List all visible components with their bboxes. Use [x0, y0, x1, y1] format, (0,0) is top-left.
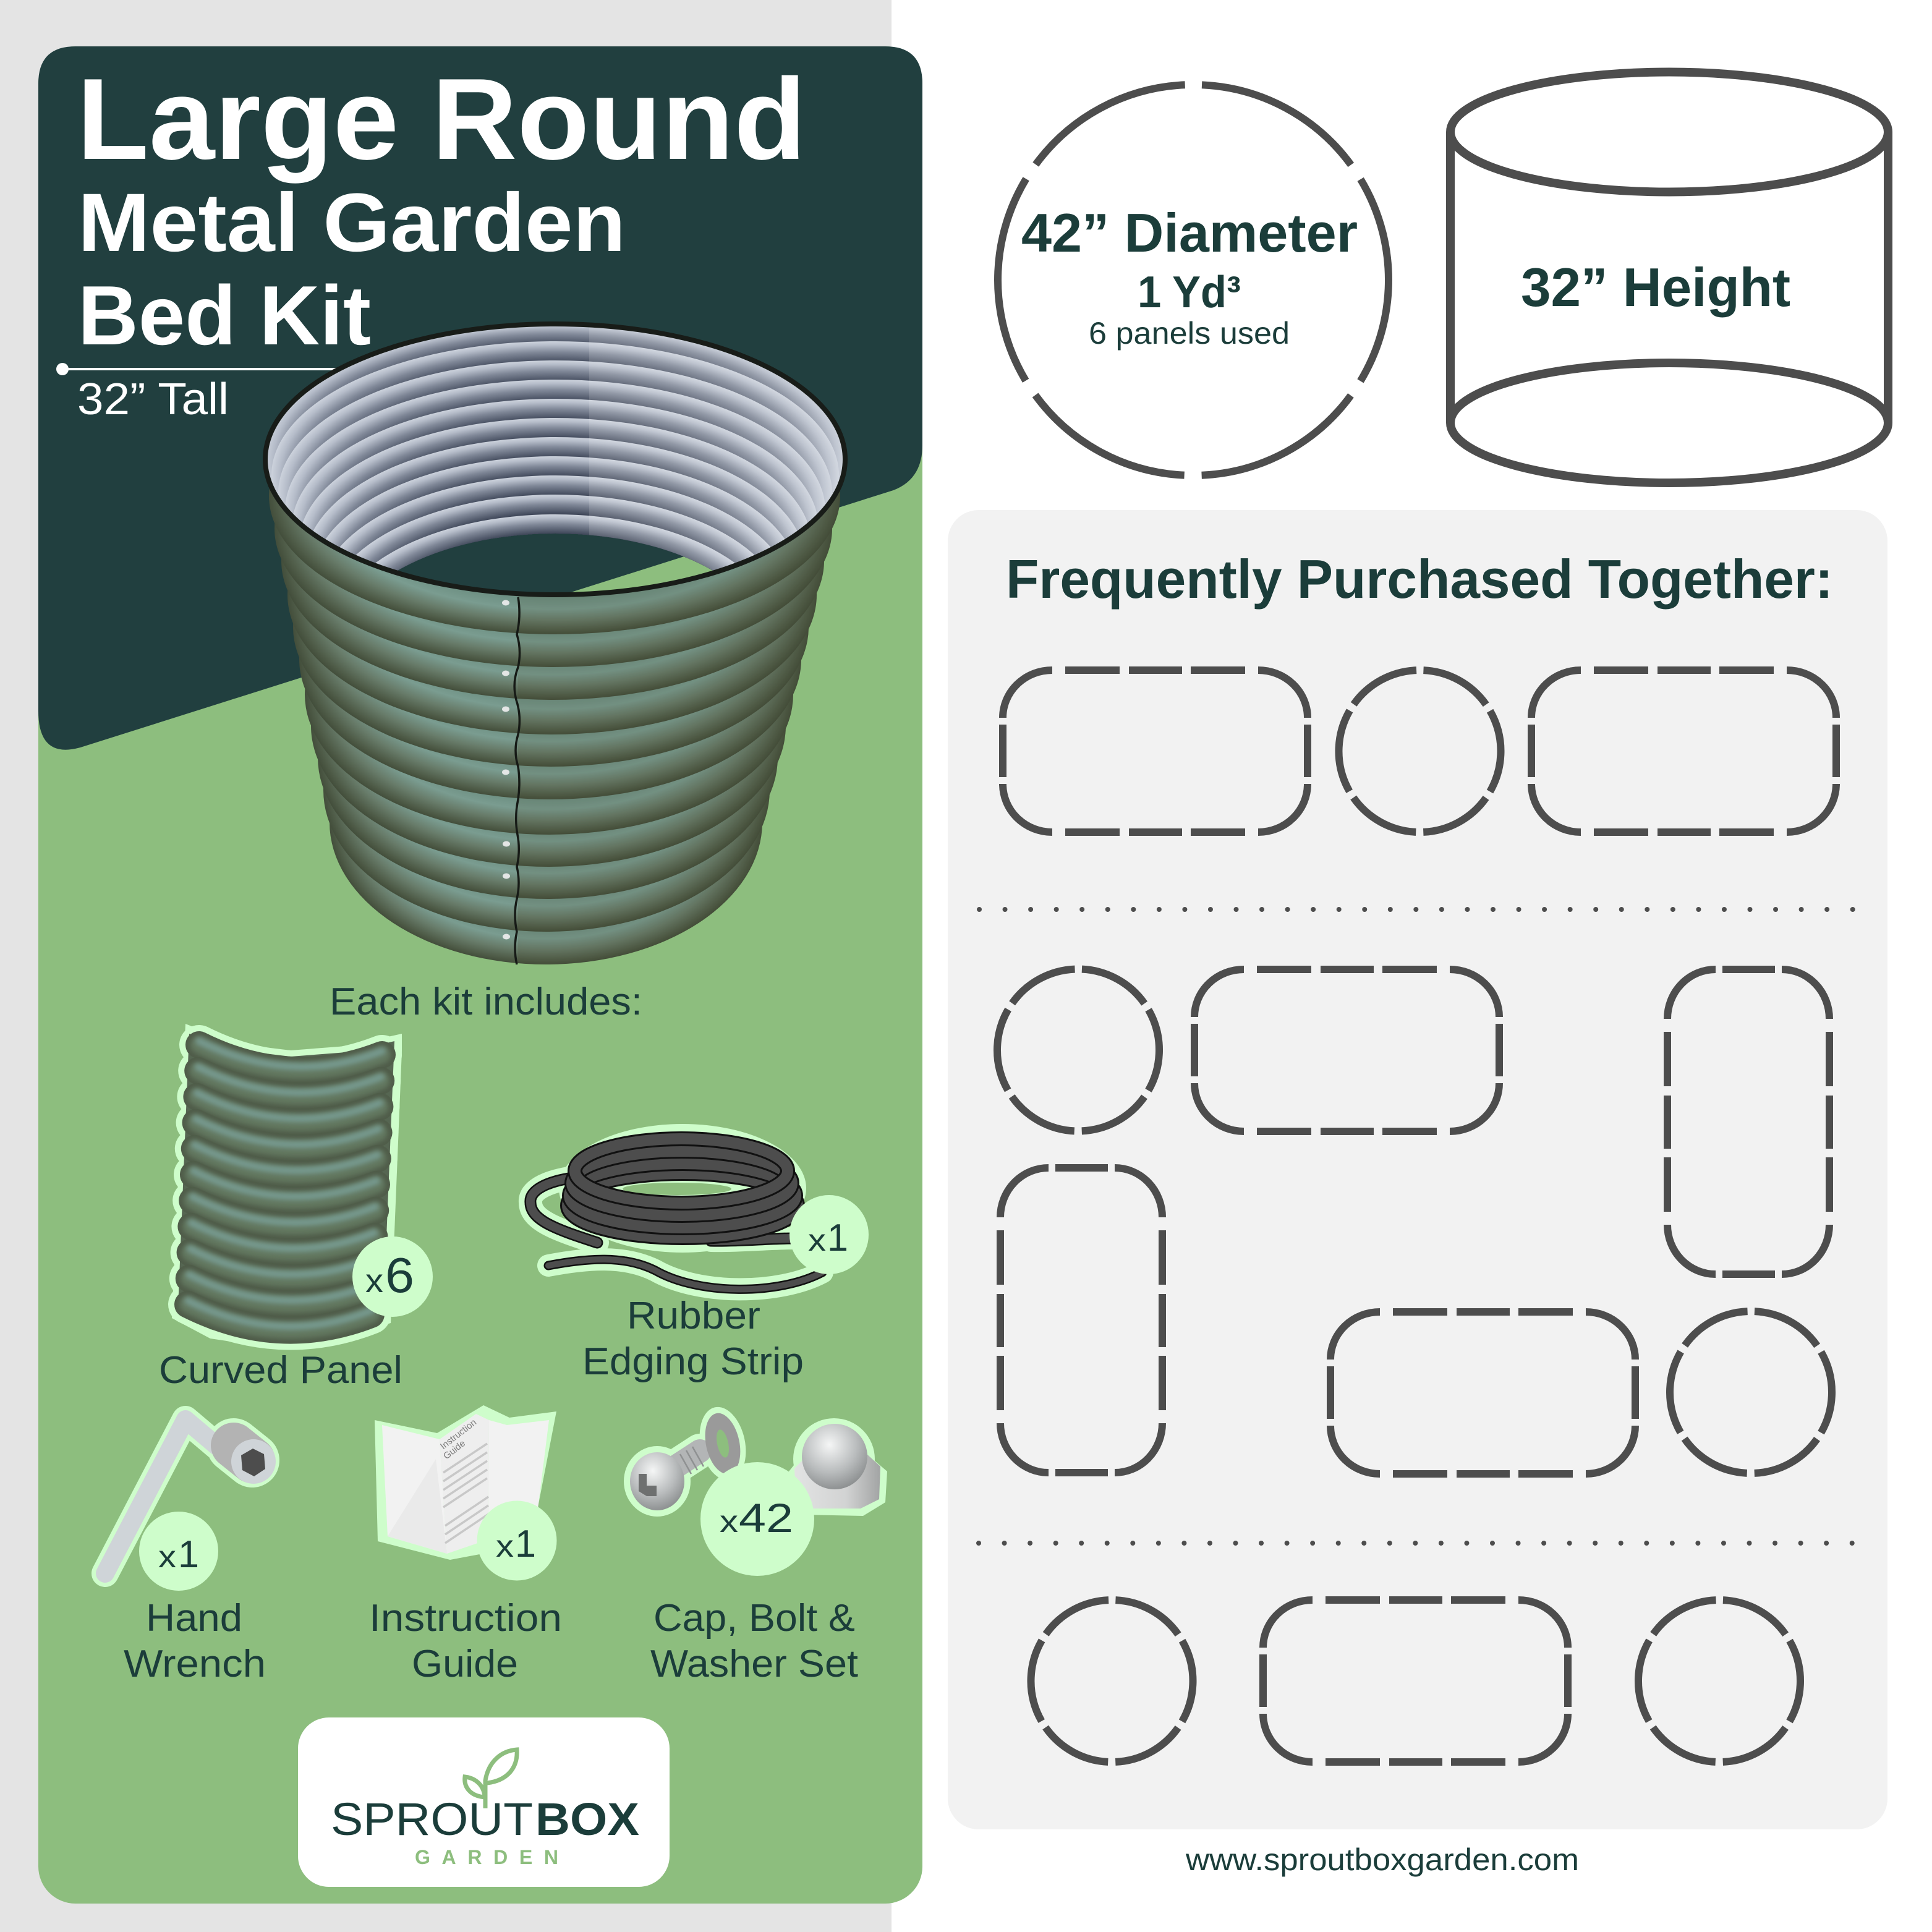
- panels label: 6 panels used: [1089, 316, 1290, 351]
- coil centre gap: [623, 1183, 731, 1195]
- placeholder row 3: [1028, 1596, 1804, 1766]
- label: hand wrench: Wrench: [124, 1643, 266, 1685]
- badge x1: 1: [827, 1217, 848, 1259]
- label: hand wrench: Hand: [146, 1597, 242, 1640]
- bed outer ribs: [269, 488, 840, 964]
- panel: frequently purchased together: [948, 510, 1887, 1829]
- height diagram: [1450, 72, 1888, 483]
- coil tails: [530, 1178, 822, 1289]
- placeholder circle: [994, 966, 1163, 1134]
- label: hand wrench: [124, 1597, 266, 1685]
- badge x42: [700, 1462, 814, 1576]
- cylinder: [1450, 72, 1888, 483]
- panel: product kit: [38, 46, 922, 1904]
- curved panel halo: [172, 1024, 402, 1348]
- badge x1: 1: [178, 1533, 199, 1576]
- volume label: 1 Yd³: [1138, 268, 1241, 317]
- website url: www.sproutboxgarden.com: [1185, 1842, 1579, 1877]
- dashed circle: [989, 76, 1397, 484]
- badge x6: 6: [385, 1248, 414, 1303]
- placeholder circle: [1635, 1596, 1804, 1766]
- placeholder rounded rect: [1330, 1312, 1635, 1474]
- placeholder rounded rect: [1531, 670, 1836, 832]
- height label: 32” Height: [1521, 257, 1790, 318]
- title: Large Round: [77, 54, 806, 184]
- logo card: BOX: [535, 1794, 639, 1845]
- includes heading: Each kit includes:: [330, 981, 642, 1023]
- badge x1: [789, 1195, 869, 1274]
- wrench handle: [105, 1419, 218, 1573]
- subtitle rule: [56, 363, 347, 375]
- dark header shape: [38, 46, 922, 750]
- wrench head: [231, 1439, 276, 1484]
- panel heading: Frequently Purchased Together:: [1006, 548, 1833, 610]
- badge x1: x: [808, 1223, 826, 1258]
- wrench halo: [105, 1419, 252, 1573]
- diameter diagram: [989, 76, 1397, 484]
- placeholder vertical rounded rect: [1000, 1168, 1162, 1473]
- placeholder vertical rounded rect: [1667, 969, 1829, 1274]
- placeholder circle: [1666, 1308, 1836, 1477]
- logo wordmark: SPROUT: [331, 1794, 533, 1845]
- title: [77, 54, 806, 362]
- green panel background: [38, 46, 922, 1904]
- grey left strip: [0, 0, 892, 1932]
- bed rim: [265, 324, 845, 595]
- cap nut: [794, 1424, 880, 1509]
- logo card: [298, 1717, 670, 1887]
- washer: [700, 1410, 746, 1478]
- label: rubber edging strip: [582, 1295, 804, 1383]
- badge x6: x: [365, 1262, 383, 1300]
- title: Metal Garden: [78, 177, 626, 269]
- label: rubber edging strip: Edging Strip: [582, 1340, 804, 1383]
- badge x1: x: [496, 1529, 514, 1564]
- coil halo: [530, 1124, 822, 1289]
- label: cap, bolt and washer set: Cap, Bolt &: [653, 1597, 855, 1640]
- item: hand wrench: [105, 1419, 276, 1685]
- label: rubber edging strip: Rubber: [627, 1295, 760, 1337]
- label: cap, bolt and washer set: Washer Set: [650, 1643, 858, 1685]
- guide pages: [382, 1414, 549, 1554]
- item: rubber edging strip: [530, 1124, 869, 1383]
- badge x42: x: [720, 1504, 738, 1539]
- bed inner ribs: [268, 326, 843, 571]
- placeholder rounded rect: [1194, 969, 1499, 1131]
- title: Bed Kit: [78, 268, 371, 362]
- placeholder row 2: [994, 966, 1836, 1477]
- badge x42: 42: [739, 1495, 793, 1541]
- badge x1: [477, 1501, 556, 1580]
- item: instruction guide: [369, 1405, 562, 1685]
- item: cap, bolt and washer set: [624, 1403, 887, 1685]
- diameter label: 42” Diameter: [1021, 202, 1358, 263]
- badge x6: [352, 1236, 433, 1317]
- logo sub-brand: GARDEN: [415, 1846, 558, 1868]
- bed seam: [514, 597, 520, 964]
- label: instruction guide: [369, 1597, 562, 1685]
- guide text lines: [443, 1444, 488, 1543]
- placeholder circle: [1335, 666, 1504, 836]
- label: cap, bolt and washer set: [650, 1597, 858, 1685]
- label: instruction guide: Instruction: [369, 1597, 562, 1640]
- hardware halo: [624, 1403, 887, 1517]
- subtitle: 32” Tall: [77, 375, 229, 424]
- placeholder rounded rect: [1263, 1600, 1568, 1762]
- placeholder circle: [1028, 1596, 1196, 1766]
- badge x1: x: [158, 1539, 176, 1574]
- label: instruction guide: Guide: [412, 1643, 518, 1685]
- placeholder rounded rect: [1003, 670, 1308, 832]
- placeholder row 1: [1003, 666, 1836, 836]
- coil rings: [568, 1139, 798, 1238]
- guide cover text: Instruction: [438, 1417, 479, 1452]
- guide cover text: Guide: [441, 1438, 467, 1462]
- badge x1: [139, 1512, 218, 1591]
- item: curved panel: [159, 1024, 433, 1392]
- badge x1: 1: [515, 1523, 536, 1565]
- logo sprout: [465, 1750, 517, 1808]
- bed bolts: [502, 600, 510, 940]
- curved panel ribs: [178, 1034, 394, 1342]
- label: curved panel: Curved Panel: [159, 1349, 402, 1392]
- bolt: [630, 1447, 704, 1510]
- guide halo: [375, 1405, 556, 1560]
- garden bed illustration: [265, 309, 864, 977]
